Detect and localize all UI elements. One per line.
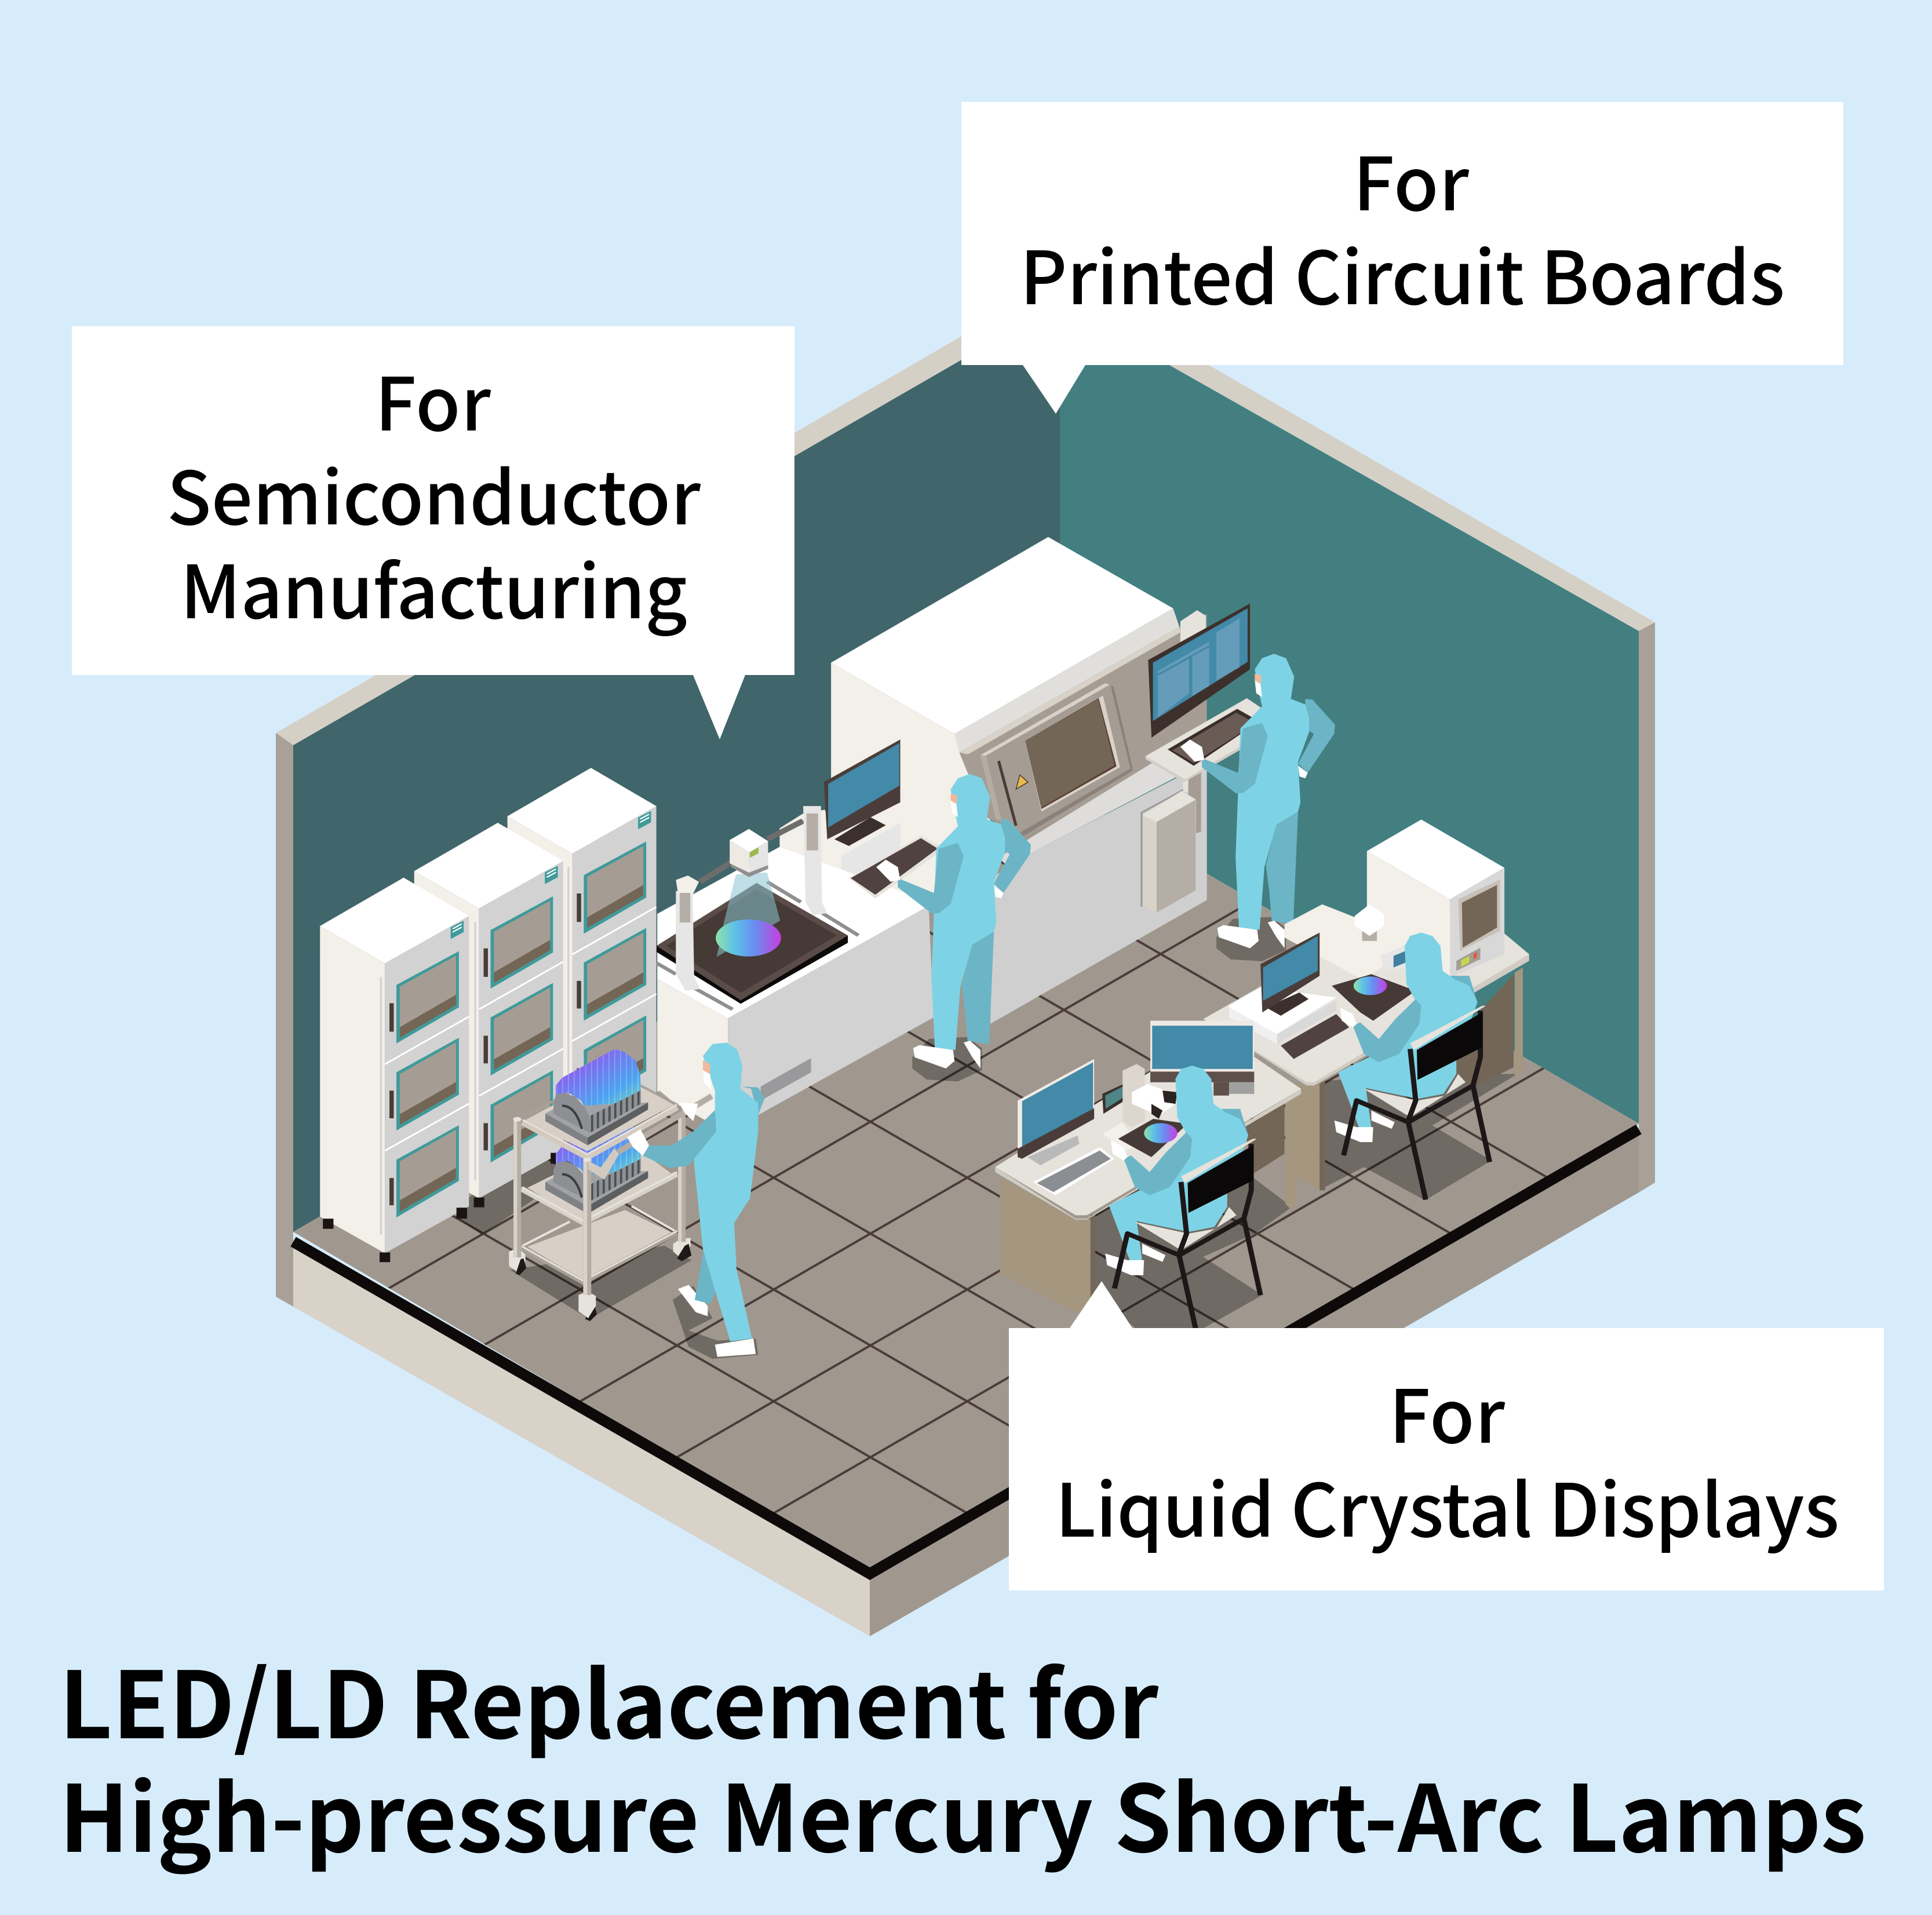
operator at control screen	[1180, 654, 1335, 961]
inspection head	[730, 829, 768, 877]
top wafer rack	[545, 1049, 648, 1146]
side cabinet	[1140, 789, 1195, 913]
wall top rim	[276, 279, 1655, 745]
left wall	[293, 303, 1060, 1232]
front keyboard	[1033, 1147, 1114, 1195]
callout: semiconductor	[72, 326, 794, 739]
right wall end	[1639, 622, 1655, 1192]
right wall	[1060, 303, 1639, 1124]
post right	[803, 806, 827, 915]
isometric clean room	[276, 336, 1655, 1636]
lower light band	[998, 763, 1183, 867]
main exposure machine	[779, 537, 1264, 1024]
locker column 2	[414, 823, 563, 1208]
small box behind monitor	[1180, 610, 1206, 647]
control screen group	[1148, 604, 1250, 738]
wafer	[716, 920, 781, 957]
light beam	[717, 873, 780, 957]
callout: liquid crystal displays	[1009, 1281, 1884, 1591]
top tray	[523, 1072, 678, 1157]
label: liquid crystal displays: For	[1389, 1359, 1505, 1464]
locker column 1	[320, 878, 469, 1262]
rear keyboard	[1281, 1014, 1349, 1059]
door handle	[998, 761, 1016, 826]
dark stage	[657, 883, 848, 1004]
gantry rail	[700, 821, 803, 882]
keyboard tray group	[1146, 698, 1264, 782]
microscope	[1103, 1064, 1178, 1150]
middle tray	[522, 1140, 677, 1223]
standing operators	[876, 654, 1335, 1081]
rear monitor	[1260, 933, 1319, 1016]
monitor: stage screen	[824, 739, 901, 846]
seated operator rear	[1335, 933, 1490, 1199]
machine upper body	[831, 537, 1206, 910]
machine left face	[831, 663, 990, 910]
tray post	[1183, 771, 1201, 833]
callout: printed circuit boards	[961, 102, 1843, 414]
base right face	[870, 1133, 1639, 1636]
left wall end	[276, 733, 293, 1307]
cart handle	[588, 1096, 712, 1180]
warning triangle	[1016, 775, 1028, 789]
wafer cart	[509, 1049, 712, 1321]
label: printed circuit boards: Printed Circuit Boards	[1020, 220, 1785, 326]
table rails	[657, 882, 858, 1009]
machine front panel	[959, 614, 1206, 836]
keyboard	[1168, 709, 1259, 766]
label: liquid crystal displays	[1055, 1359, 1839, 1558]
cart posts	[513, 1114, 682, 1295]
lower wafer rack	[545, 1118, 648, 1214]
front wafer	[1144, 1123, 1178, 1143]
machine upper strip	[954, 608, 1179, 753]
monitor: control screen	[1148, 604, 1250, 738]
door window	[1025, 696, 1120, 812]
monitor base group	[779, 739, 901, 910]
title: LED/LD Replacement for	[59, 1632, 1159, 1765]
title: High-pressure Mercury Short-Arc Lamps	[59, 1745, 1867, 1878]
lower grey body	[990, 767, 1207, 1024]
seated operator front	[1105, 1066, 1260, 1333]
bottom tray	[522, 1206, 677, 1282]
table top	[657, 847, 934, 1018]
rear inspection instrument	[1285, 904, 1416, 1021]
rear instrument cabinet	[1367, 819, 1504, 977]
tray	[1146, 698, 1264, 782]
rear desk	[1203, 901, 1529, 1190]
floor tile grid	[388, 861, 1547, 1513]
label: semiconductor: For	[375, 346, 491, 452]
front stage	[1118, 1119, 1188, 1157]
inspection desks	[995, 819, 1529, 1333]
door frame	[980, 683, 1133, 836]
label: printed circuit boards	[1020, 126, 1785, 326]
floor	[293, 789, 1639, 1571]
cart shadow	[510, 1246, 691, 1319]
table front face	[728, 906, 934, 1133]
white base under monitor	[779, 809, 901, 910]
operator at stage	[876, 774, 1031, 1081]
floor edge strip	[293, 1129, 1639, 1574]
table left face	[657, 979, 728, 1133]
cart wheels	[509, 1238, 691, 1321]
base left face	[293, 1246, 870, 1636]
front back monitor	[1150, 1021, 1254, 1096]
front desk	[995, 1041, 1301, 1314]
label: semiconductor	[167, 346, 701, 640]
storage lockers	[320, 768, 674, 1262]
stage table	[657, 847, 934, 1133]
locker column 3	[508, 768, 657, 1152]
panel top edge	[959, 627, 1180, 754]
label: semiconductor: Semiconductor	[167, 440, 701, 546]
rear floor shadow	[1325, 1067, 1529, 1201]
machine top	[831, 537, 1173, 734]
rear monitor base	[1229, 987, 1336, 1044]
keyboard on stage table and stage	[657, 806, 945, 1009]
machine door and lower body	[980, 683, 1207, 1024]
locker floor shadow	[455, 1090, 674, 1235]
tablet	[1102, 1084, 1128, 1114]
label: liquid crystal displays: Liquid Crystal Displays	[1055, 1453, 1839, 1558]
vent grill	[761, 1058, 811, 1101]
label: semiconductor: Manufacturing	[180, 534, 687, 640]
keyboard	[849, 836, 945, 899]
post left	[676, 876, 700, 991]
label: printed circuit boards: For	[1353, 126, 1469, 232]
person with cart	[627, 1042, 764, 1359]
front left monitor	[1018, 1059, 1094, 1165]
front floor shadow	[1095, 1154, 1292, 1333]
